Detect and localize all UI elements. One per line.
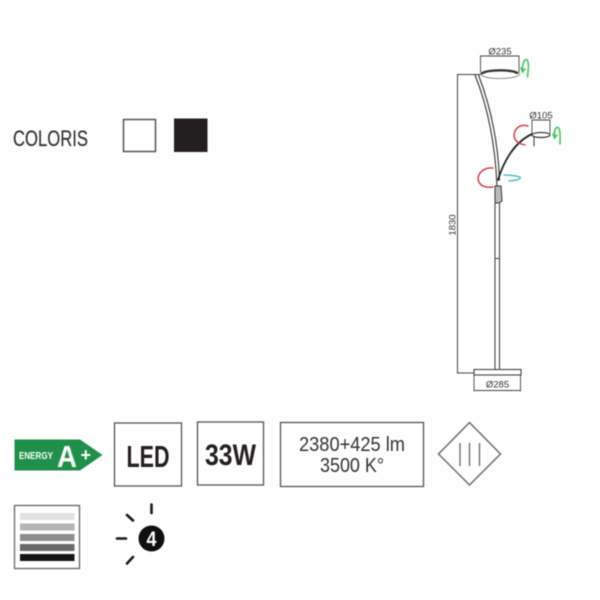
icon: class III diamond [438, 422, 500, 485]
icon: four-step light [117, 504, 164, 564]
pole [495, 202, 500, 369]
base [474, 370, 521, 375]
badge: LED: LED [126, 439, 170, 474]
swatch: black [174, 118, 208, 152]
badge: lumens and colour temperature [280, 422, 424, 486]
dimension: top head diameter: Ø235 [488, 46, 512, 58]
badge: lumens and colour temperature: 2380+425 lm [299, 434, 405, 456]
heading: coloris: COLORIS [13, 126, 88, 151]
badge: energy A+: + [80, 445, 91, 465]
lamp technical drawing [448, 46, 560, 391]
arrow: red rotation lower [478, 168, 493, 187]
small lamp head [532, 132, 550, 146]
height dimension 1830 [448, 74, 480, 373]
badge: wattage: 33W [205, 439, 257, 472]
arrow: green rotation top [521, 60, 528, 77]
icon: dimmer gradient box [14, 506, 80, 568]
badge: energy A+ [14, 439, 102, 474]
small reading arm [498, 134, 532, 180]
arrow: cyan rotation [504, 175, 520, 181]
switch housing [495, 186, 502, 203]
dimension: small head diameter [529, 110, 553, 133]
arrow: green rotation small [553, 127, 560, 144]
curved main arm [475, 75, 500, 186]
dimension: top head diameter [480, 46, 519, 72]
badge: wattage [198, 422, 264, 485]
main lamp head [480, 70, 520, 78]
dimension: base diameter [474, 375, 520, 391]
dimension: base diameter: Ø285 [486, 380, 509, 390]
badge: energy A+: ENERGY [19, 451, 53, 462]
arrow: red rotation upper [514, 125, 528, 145]
badge: energy A+: A [57, 439, 77, 474]
dimension: small head diameter: Ø105 [529, 110, 553, 122]
height dimension 1830: 1830 [448, 214, 458, 236]
icon: four-step light: 4 [146, 528, 157, 551]
badge: lumens and colour temperature: 3500 K° [320, 455, 384, 477]
badge: LED [114, 423, 182, 486]
swatch: white [124, 120, 156, 152]
